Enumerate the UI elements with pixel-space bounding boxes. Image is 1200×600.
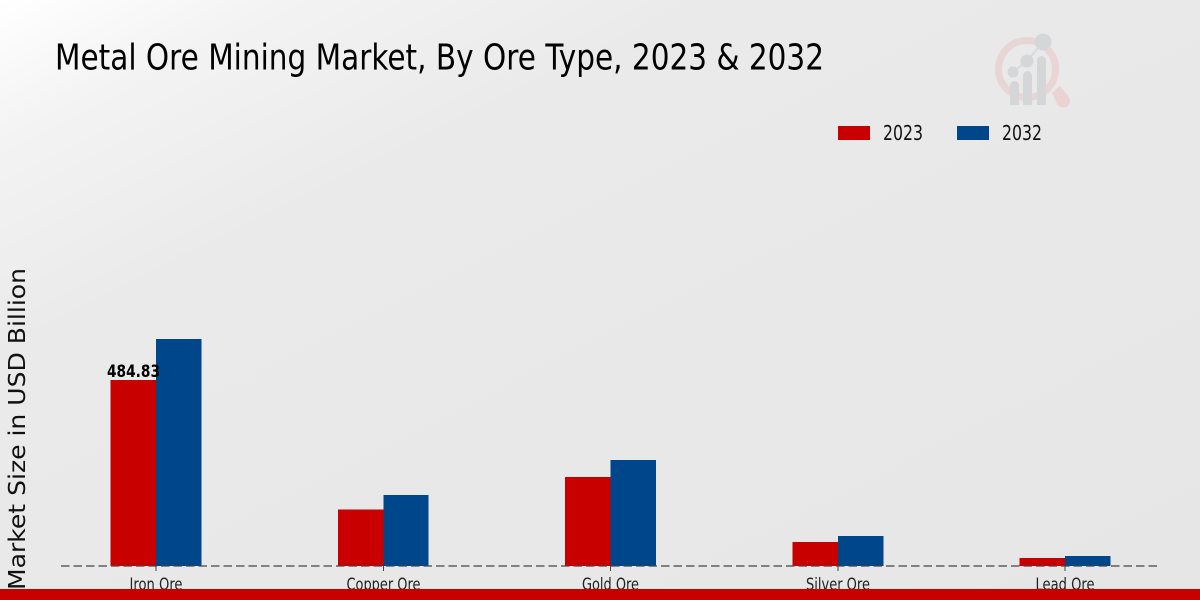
legend: 2023: 2023 — [883, 121, 923, 145]
bar chart — [61, 339, 1160, 595]
title: Metal Ore Mining Market, By Ore Type, 2023 & 2032 — [55, 38, 824, 78]
value label: 484.83 — [107, 362, 160, 381]
legend — [838, 121, 1042, 145]
y-axis label: Market Size in USD Billion — [5, 268, 31, 590]
category labels: Copper Ore — [346, 575, 420, 595]
category labels: Lead Ore — [1036, 575, 1094, 595]
category labels — [130, 575, 1094, 595]
bars: Lead Ore — [1020, 556, 1110, 566]
axis baseline — [61, 565, 1160, 567]
legend: 2023 — [838, 121, 923, 145]
legend: 2032: 2032 — [1002, 121, 1042, 145]
icon: watermark logo — [998, 34, 1070, 108]
bars: Copper Ore — [338, 495, 428, 566]
axis ticks — [156, 566, 1065, 571]
category labels: Iron Ore — [130, 575, 182, 595]
bottom red band — [0, 589, 1200, 600]
bars: Gold Ore — [565, 460, 656, 566]
legend: 2032 — [957, 121, 1042, 145]
bars: Silver Ore — [792, 536, 884, 566]
category labels: Silver Ore — [806, 575, 870, 595]
category labels: Gold Ore — [582, 575, 639, 595]
bars: Iron Ore — [110, 339, 202, 566]
